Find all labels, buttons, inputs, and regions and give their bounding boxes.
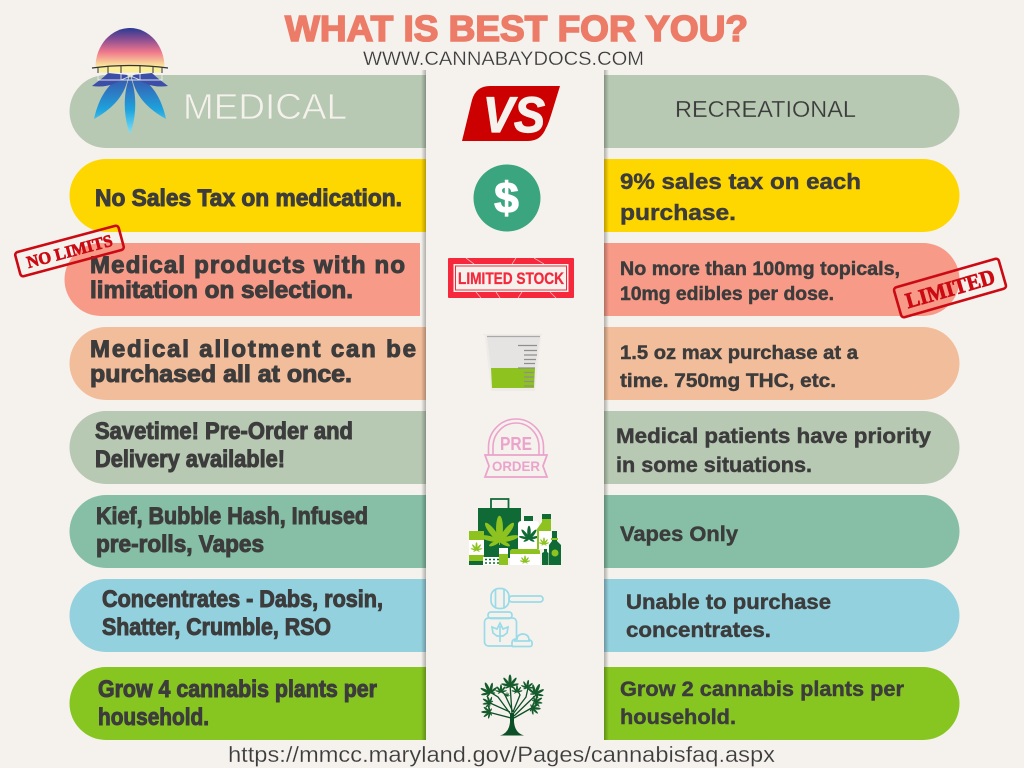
icon: VS badge	[462, 86, 560, 143]
row pill: concentrates	[69, 579, 426, 652]
stamp: no limits	[15, 225, 124, 277]
website subtitle: WWW.CANNABAYDOCS.COM	[363, 49, 644, 70]
icon: limited stock stamp	[448, 258, 574, 298]
text: no more than: No more than 100mg topicals,	[620, 259, 900, 280]
text: savetime: Delivery available!	[95, 446, 285, 473]
icon: pre-order badge	[485, 419, 547, 477]
text: medical products: Medical products with no	[90, 252, 405, 279]
text: max purchase	[620, 343, 858, 392]
row pill: vapes	[604, 495, 959, 568]
icon: measuring cup	[482, 334, 543, 391]
text: priority: in some situations.	[616, 454, 812, 477]
text: concentrates: Shatter, Crumble, RSO	[102, 614, 331, 641]
text: medical allotment: Medical allotment can be	[90, 336, 416, 363]
text: grow 2: household.	[620, 706, 736, 729]
stamp: no limits: NO LIMITS	[25, 231, 115, 272]
source link: https://mmcc.maryland.gov/Pages/cannabisfaq.aspx	[228, 742, 775, 767]
row pill: allotment	[604, 327, 959, 400]
text: no more than: 10mg edibles per dose.	[620, 284, 834, 305]
heading: recreational: RECREATIONAL	[675, 96, 856, 122]
icon: concentrates jar	[484, 588, 543, 646]
text: grow 4: household.	[98, 704, 209, 731]
icon: pre-order badge: PRE	[500, 434, 532, 454]
row pill: tax	[604, 159, 959, 232]
icon: limited stock stamp: LIMITED STOCK	[458, 269, 565, 288]
icon: dollar	[474, 164, 540, 232]
text: vapes only: Vapes Only	[620, 523, 738, 546]
text: kief: Kief, Bubble Hash, Infused	[96, 503, 368, 530]
panel: recreational column	[604, 75, 959, 740]
text: grow 4: Grow 4 cannabis plants per	[98, 676, 377, 703]
icon: cannabis products	[469, 499, 561, 565]
header pill: recreational	[604, 75, 959, 148]
text: no more than	[620, 259, 900, 305]
panel: center column	[426, 68, 604, 740]
text: concentrates	[102, 586, 383, 641]
row pill: concentrates	[604, 579, 959, 652]
icon: pre-order badge: ORDER	[492, 458, 540, 474]
text: savetime	[95, 418, 353, 473]
text: max purchase: time. 750mg THC, etc.	[620, 371, 836, 392]
text: grow 2	[620, 678, 904, 729]
text: sales tax: 9% sales tax on each	[620, 169, 861, 194]
header pill: medical	[70, 75, 426, 148]
row pill: hash	[69, 495, 426, 568]
text: no sales tax: No Sales Tax on medication.	[95, 185, 402, 212]
text: sales tax	[620, 169, 861, 225]
row pill: selection	[604, 243, 959, 316]
text: medical allotment: purchased all at once.	[90, 361, 352, 388]
row pill: selection	[64, 243, 420, 316]
text: recreational rows	[616, 169, 931, 729]
text: priority	[616, 425, 931, 477]
center column shadow left	[421, 70, 426, 740]
text: savetime: Savetime! Pre-Order and	[95, 418, 353, 445]
row pill: grow	[604, 667, 959, 740]
row pill: pre-order	[69, 411, 426, 484]
text: unable	[626, 591, 831, 642]
text: medical allotment	[90, 336, 416, 388]
text: sales tax: purchase.	[620, 200, 736, 225]
icon: cannabis tree	[477, 674, 547, 736]
center column shadow right	[604, 70, 609, 740]
row pill: allotment	[69, 327, 426, 400]
text: max purchase: 1.5 oz max purchase at a	[620, 343, 858, 364]
text: kief	[96, 503, 368, 558]
row pill: grow	[69, 667, 426, 740]
panel: medical column	[64, 75, 426, 740]
row pill: priority	[604, 411, 959, 484]
text: medical products	[90, 252, 405, 304]
text: concentrates: Concentrates - Dabs, rosin,	[102, 586, 383, 613]
stamp: limited: LIMITED	[902, 264, 998, 313]
text: kief: pre-rolls, Vapes	[96, 531, 264, 558]
icon: dollar: $	[494, 174, 519, 223]
title: WHAT IS BEST FOR YOU?	[285, 8, 748, 49]
logo	[92, 28, 168, 134]
text: priority: Medical patients have priority	[616, 425, 931, 448]
text: medical rows	[90, 185, 416, 731]
text: unable: Unable to purchase	[626, 591, 831, 614]
heading: medical: MEDICAL	[183, 86, 347, 127]
text: unable: concentrates.	[626, 619, 771, 642]
text: medical products: limitation on selection.	[90, 277, 353, 304]
text: grow 4	[98, 676, 377, 731]
icon: VS badge: VS	[483, 87, 545, 143]
text: grow 2: Grow 2 cannabis plants per	[620, 678, 904, 701]
row pill: tax	[69, 159, 426, 232]
